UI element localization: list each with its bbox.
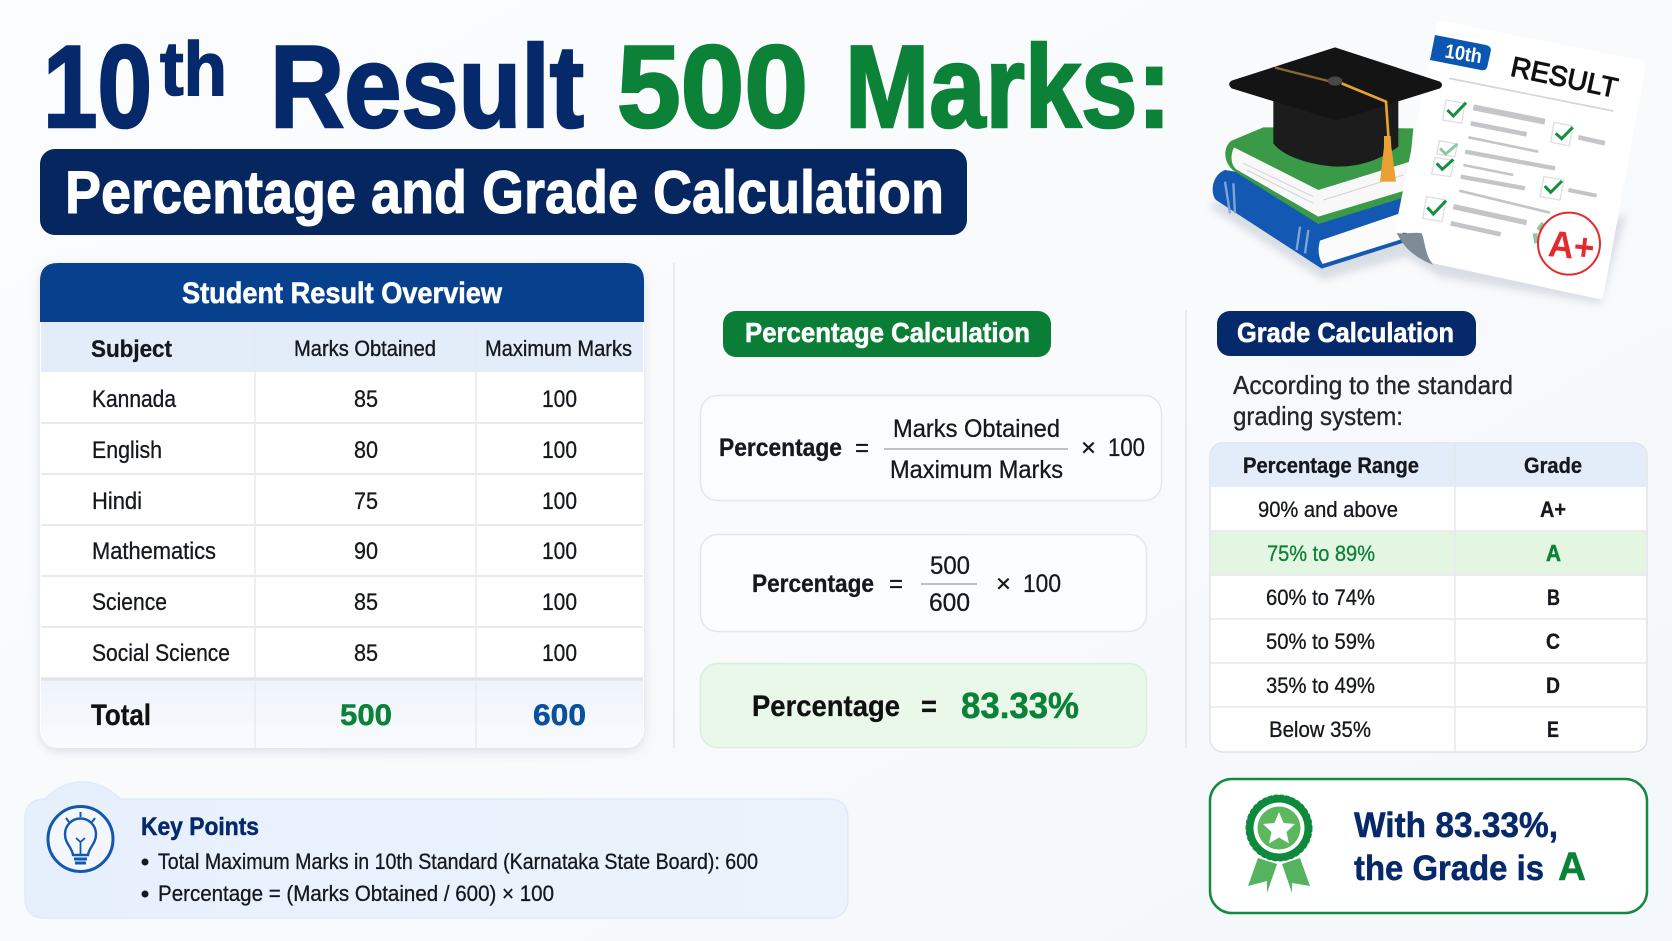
heading: percentage calculation — [723, 311, 1051, 357]
panel: percentage substituted: 100 — [1023, 570, 1061, 598]
panel: percentage result: Percentage — [752, 690, 900, 723]
sheet heading: RESULT — [1508, 51, 1620, 104]
sheet check marks — [1427, 103, 1573, 243]
sheet checkboxes — [1423, 100, 1573, 222]
panel: percentage substituted: 600 — [929, 589, 970, 617]
heading: grade calculation: Grade Calculation — [1237, 317, 1454, 348]
grade row D: D — [1546, 673, 1560, 698]
panel: percentage formula: 100 — [1108, 434, 1145, 462]
row: Social Science: 85 — [354, 640, 378, 667]
row: Science — [92, 589, 577, 616]
row: Hindi: Hindi — [92, 488, 142, 515]
key points heading: Key Points — [141, 813, 259, 841]
row: Science: Science — [92, 589, 167, 616]
illustration: books, graduation cap and result sheet — [1208, 21, 1646, 303]
grade row D — [1266, 673, 1560, 698]
row: Total: 500 — [340, 699, 392, 732]
sheet tag: 10th — [1443, 41, 1484, 68]
panel: percentage formula: × — [1081, 434, 1096, 462]
icon: graduation cap — [1229, 47, 1442, 182]
panel: percentage formula: Marks Obtained — [893, 415, 1060, 443]
panel: percentage formula: = — [855, 434, 869, 462]
stamp: A plus: A+ — [1546, 222, 1597, 269]
title: 10 — [43, 21, 152, 152]
grade row C: 50% to 59% — [1266, 629, 1375, 654]
heading: grade calculation — [1217, 311, 1476, 356]
table header row: Subject — [91, 336, 172, 363]
table header row — [41, 322, 643, 372]
panel: percentage substituted — [700, 534, 1146, 632]
row: English: 80 — [354, 437, 378, 464]
row: Kannada — [92, 386, 577, 413]
title: th — [160, 27, 227, 112]
row: Hindi: 75 — [354, 488, 378, 515]
row: Social Science: Social Science — [92, 640, 230, 667]
illustration shadow — [1208, 167, 1627, 303]
icon: light bulb — [48, 806, 113, 872]
title: 500 — [617, 21, 808, 152]
grade table header: Percentage Range — [1243, 453, 1419, 478]
row: Science: 85 — [354, 589, 378, 616]
row: Total: 600 — [533, 699, 586, 732]
row: English — [92, 437, 577, 464]
grade row A plus: 90% and above — [1258, 497, 1398, 522]
table header row: Marks Obtained — [294, 336, 436, 361]
callout text: A — [1558, 845, 1586, 889]
grade table header: Grade — [1524, 453, 1582, 478]
row: Mathematics: Mathematics — [92, 538, 216, 565]
title — [43, 21, 1171, 152]
grade row C — [1266, 629, 1560, 654]
grade row E — [1269, 717, 1559, 742]
title: Result — [270, 21, 584, 152]
panel: percentage formula — [700, 396, 1162, 500]
row: Hindi: 100 — [542, 488, 577, 515]
text: grading system intro: grading system: — [1233, 401, 1403, 431]
callout text — [1354, 806, 1586, 889]
panel: percentage result — [700, 664, 1146, 748]
grade row A plus — [1258, 497, 1566, 522]
text: grading system intro: According to the standard — [1233, 370, 1513, 400]
stamp: A plus — [1538, 213, 1600, 275]
icon: result sheet — [1395, 21, 1646, 299]
row: Social Science — [92, 640, 577, 667]
sheet tag — [1430, 35, 1491, 70]
subtitle banner: Percentage and Grade Calculation — [65, 159, 944, 226]
row: Mathematics: 90 — [354, 538, 378, 565]
key point two: Percentage = (Marks Obtained / 600) × 100 — [158, 881, 554, 906]
grade row A: 75% to 89% — [1267, 541, 1375, 566]
row: Mathematics: 100 — [542, 538, 577, 565]
table title bar — [40, 263, 644, 322]
grade row D: 35% to 49% — [1266, 673, 1375, 698]
sheet lines — [1451, 107, 1605, 234]
heading: percentage calculation: Percentage Calculation — [745, 317, 1030, 348]
icon: blue book — [1213, 170, 1407, 269]
callout text: With 83.33%, — [1354, 806, 1558, 845]
title: Marks: — [845, 21, 1171, 152]
row: Social Science: 100 — [542, 640, 577, 667]
panel: percentage substituted: Percentage — [752, 570, 874, 598]
row: Total — [91, 699, 586, 732]
panel: percentage substituted: × — [996, 570, 1011, 598]
row: Kannada: 100 — [542, 386, 577, 413]
grade table header — [1211, 444, 1646, 487]
grade row A: A — [1546, 540, 1561, 566]
panel: percentage result: 83.33% — [961, 685, 1079, 726]
callout text: the Grade is — [1354, 849, 1544, 888]
panel: percentage result: = — [921, 690, 937, 723]
key point one: Total Maximum Marks in 10th Standard (Karnataka State Board): 600 — [158, 849, 758, 874]
icon: award ribbon medal — [1246, 795, 1312, 893]
text: grading system intro — [1233, 370, 1513, 431]
row: Science: 100 — [542, 589, 577, 616]
icon: green book — [1225, 127, 1413, 224]
grade row B — [1266, 585, 1560, 610]
highlighted row background — [1211, 531, 1646, 575]
grade row C: C — [1546, 629, 1560, 654]
row: Kannada: Kannada — [92, 386, 177, 413]
panel: percentage formula: Maximum Marks — [890, 456, 1063, 484]
grade row B: B — [1547, 585, 1560, 610]
row: Kannada: 85 — [354, 386, 378, 413]
table title bar: Student Result Overview — [182, 277, 503, 310]
grade row B: 60% to 74% — [1266, 585, 1375, 610]
callout: final grade — [1210, 779, 1647, 913]
row: Hindi — [92, 488, 577, 515]
grade row E: E — [1547, 717, 1559, 742]
table total row background — [41, 679, 643, 748]
panel: percentage formula: Percentage — [719, 434, 842, 462]
row: English: 100 — [542, 437, 577, 464]
panel: percentage substituted: 500 — [930, 552, 970, 580]
panel: key points — [25, 782, 848, 918]
row: English: English — [92, 437, 162, 464]
row: Total: Total — [91, 699, 151, 732]
panel: grade table — [1210, 443, 1647, 752]
grade row A plus: A+ — [1540, 497, 1566, 522]
grade row E: Below 35% — [1269, 717, 1371, 742]
table header row: Maximum Marks — [485, 336, 632, 361]
row: Mathematics — [92, 538, 577, 565]
grade row A — [1267, 540, 1561, 566]
panel: percentage substituted: = — [889, 570, 903, 598]
panel: student result overview table — [40, 263, 644, 748]
